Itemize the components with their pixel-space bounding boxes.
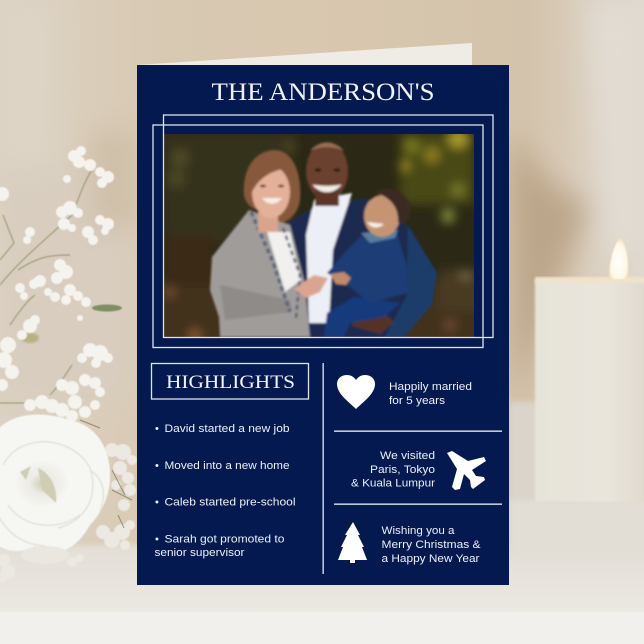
- photo background foliage: [164, 134, 474, 337]
- highlights list: [154, 423, 296, 559]
- row divider one: [334, 430, 502, 432]
- highlights list: •: [155, 534, 159, 546]
- highlights list: senior supervisor: [154, 547, 245, 559]
- greeting text: Merry Christmas &: [382, 539, 481, 551]
- table front edge: [0, 612, 644, 644]
- row divider two: [334, 504, 502, 505]
- highlights list: Sarah got promoted to: [164, 534, 284, 546]
- highlights heading: HIGHLIGHTS: [166, 372, 295, 393]
- married text: Happily married: [389, 381, 472, 393]
- icon: airplane: [447, 451, 486, 490]
- column divider: [322, 363, 324, 574]
- highlights list: David started a new job: [164, 423, 290, 435]
- woman: [210, 150, 328, 337]
- baby's breath flowers and rose: [0, 146, 137, 583]
- married text: [389, 381, 472, 407]
- upper clusters: [0, 146, 114, 422]
- highlights list: Moved into a new home: [164, 460, 290, 472]
- card front panel: [137, 65, 509, 585]
- double outline frames: [153, 115, 493, 348]
- candle: [535, 237, 644, 502]
- man: [287, 142, 437, 337]
- candle flame: [609, 237, 628, 279]
- table surface: [0, 545, 644, 644]
- greeting text: a Happy New Year: [382, 553, 480, 565]
- icon: heart: [337, 375, 375, 409]
- card back page: [137, 43, 472, 66]
- side clusters: [0, 443, 137, 583]
- travel text: & Kuala Lumpur: [351, 478, 435, 490]
- highlights list: Caleb started pre-school: [164, 496, 296, 508]
- greeting text: [382, 525, 481, 565]
- travel text: We visited: [380, 450, 435, 462]
- rose: [0, 415, 110, 564]
- table right surface: [509, 500, 644, 560]
- child: [324, 189, 410, 337]
- highlights list: •: [155, 460, 159, 472]
- highlights heading: [152, 364, 308, 399]
- travel text: Paris, Tokyo: [370, 464, 435, 476]
- travel text: [351, 450, 435, 490]
- highlights list: •: [155, 496, 159, 508]
- title: THE ANDERSON'S: [212, 79, 434, 106]
- highlights list: •: [155, 423, 159, 435]
- icon: christmas tree: [338, 522, 367, 563]
- table behind candle: [509, 402, 539, 552]
- greeting text: Wishing you a: [382, 525, 455, 537]
- married text: for 5 years: [389, 395, 446, 407]
- family photo: [164, 134, 474, 337]
